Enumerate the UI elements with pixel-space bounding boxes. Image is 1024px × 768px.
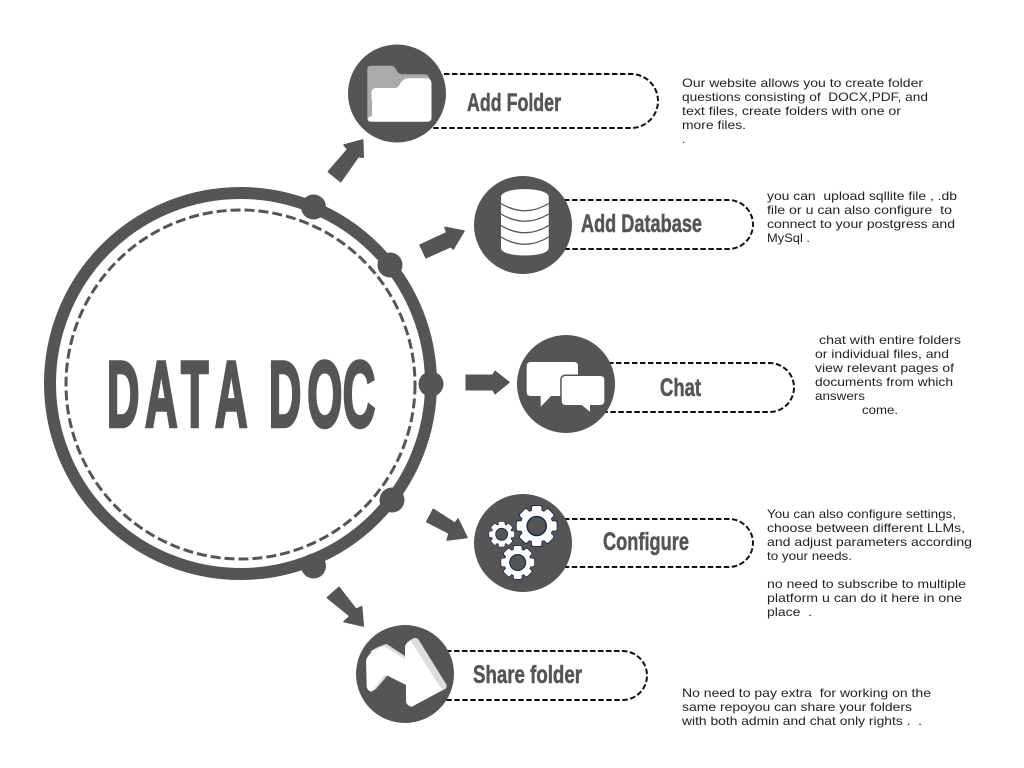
label: Add Folder [467,89,561,117]
inner dashed ring [66,210,415,559]
label: Chat [660,374,701,402]
description: chat with entire folders [819,333,961,347]
description: MySql . [767,231,810,245]
panel: Add Folder [348,44,928,146]
title: DATA DOC [107,341,375,447]
description [681,686,931,728]
dashed pill [425,74,658,128]
dashed pill [564,200,753,249]
description: come. [862,403,898,417]
description: same repoyou can share your folders [682,700,912,714]
description: place . [767,605,812,619]
description: Our website allows you to create folder [682,76,923,90]
description: view relevant pages of [815,361,955,375]
description: file or u can also configure to [767,203,952,217]
dashed pill [600,363,794,412]
icon: chat bubbles [517,335,615,433]
dashed pill [446,651,647,700]
label: Share folder [473,661,582,689]
icon: gears [474,494,572,592]
description: or individual files, and [815,347,949,361]
description: platform u can do it here in one [767,591,962,605]
arrow to Add Database [420,227,464,258]
dashed pill [564,519,753,567]
panel: Configure [474,494,972,619]
outer ring [50,193,431,574]
description [682,76,928,146]
arrow to Chat [466,371,509,394]
arrow to Share folder [327,587,363,626]
description: connect to your postgress and [767,217,955,231]
label: Configure [603,528,689,556]
ring node 2 [378,252,402,278]
description: You can also configure settings, [767,507,956,521]
description [815,333,961,417]
ring node 3 [418,372,444,396]
icon: share arrow [356,625,454,723]
description: no need to subscribe to multiple [767,577,966,591]
description: questions consisting of DOCX,PDF, and [682,90,928,104]
arrow to Add Folder [328,140,363,182]
description: and adjust parameters according [767,535,972,549]
description: . [682,132,685,146]
description [767,189,957,245]
panel: Add Database [474,176,957,274]
ring node 4 [380,488,404,512]
description: to your needs. [767,549,852,563]
icon: folder [348,44,446,142]
description: choose between different LLMs, [767,521,965,535]
icon: database [474,176,572,274]
ring node 5 [301,554,326,578]
description: text files, create folders with one or [682,104,901,118]
panel: Chat [517,333,961,433]
panel: Share folder [356,625,931,728]
arrow to Configure [427,509,467,540]
ring node 1 [301,194,326,220]
label: Add Database [581,210,702,238]
description [767,507,972,619]
description: you can upload sqllite file , .db [767,189,957,203]
central circle: Data Doc [50,193,444,578]
description: with both admin and chat only rights . . [681,714,922,728]
description: answers [815,389,865,403]
description: documents from which [815,375,953,389]
description: No need to pay extra for working on the [682,686,931,700]
description: more files. [682,118,746,132]
